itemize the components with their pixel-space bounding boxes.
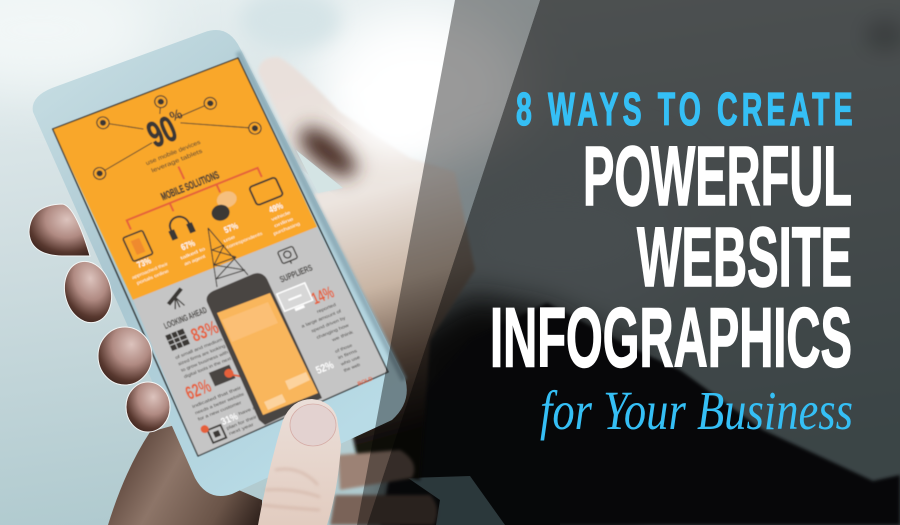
heading: mobile solutions: MOBILE SOLUTIONS (159, 169, 221, 203)
text block: right column two: in firms (337, 348, 359, 360)
icon: headset (165, 213, 195, 239)
stat: 57%: 57% (222, 221, 240, 235)
finger four (126, 382, 170, 432)
text block: left column one (174, 337, 233, 379)
stat: 67% (175, 235, 210, 267)
heading: looking ahead: LOOKING AHEAD (162, 305, 209, 331)
screen grey section (133, 227, 388, 456)
stat: 73% (126, 250, 172, 286)
text block: right column two (334, 341, 365, 373)
headline text (490, 84, 853, 441)
stat: 73%: approached their (131, 261, 169, 280)
icon: telescope (164, 289, 188, 311)
icon: radio tower (208, 228, 248, 287)
text block: left column one: of small and medium (174, 337, 224, 360)
stat: 49%: purchasing (272, 221, 301, 236)
thumb creases (262, 469, 320, 510)
text block: right column two: the web (343, 362, 361, 373)
stat: 57% (218, 213, 264, 250)
screen orange section (53, 58, 317, 300)
dark arm silhouette (380, 295, 900, 525)
hand: four fingers on the left edge (29, 204, 170, 432)
text block: left column one: sized firms are looking (177, 343, 227, 366)
stat: 73%: 73% (135, 256, 153, 270)
stat: 67%: 67% (179, 238, 196, 252)
big stat 90%: 90 (140, 107, 183, 155)
hand: palm and upper finger behind the phone (258, 57, 475, 480)
icon: building (165, 329, 190, 351)
text block: left column two: for a new customer (197, 400, 243, 422)
text block: right column two: who use (340, 354, 361, 367)
stat: 31%: 31% (219, 411, 240, 428)
teal background patch below the fingers (408, 476, 505, 525)
icon: monitor (277, 283, 314, 315)
orange tree connector (114, 140, 262, 229)
dark translucent panel (367, 0, 900, 525)
network of people around 90 percent (72, 64, 263, 196)
icon: camera (277, 246, 299, 267)
stat: 49% (262, 197, 301, 236)
text block: right column one: we think (331, 329, 355, 342)
text block: left column two: indicated that their (191, 385, 243, 409)
stat: 49%: 49% (267, 201, 284, 215)
stat: 49%: online (273, 216, 295, 228)
translucent grey band (357, 0, 540, 525)
finger two (58, 256, 118, 328)
heading line: 8 ways to create: 8 WAYS TO CREATE (516, 84, 853, 136)
icon: magnifier over card (209, 362, 244, 388)
text block: left column three (222, 405, 263, 436)
stat: 57%: correspondents (225, 230, 264, 250)
text block: left column one: to grow business with (180, 349, 230, 373)
screen contents in skewed coordinates (64, 64, 377, 448)
stat: 67%: an agent (183, 253, 207, 266)
phone screen: infographic (53, 58, 388, 456)
text block: left column two (191, 385, 248, 422)
icon: speech bubbles (205, 189, 244, 223)
text block: left column one: digital tools in the next (183, 356, 233, 379)
lower hand cradling the phone (108, 425, 262, 525)
finger one (29, 204, 90, 256)
thumb nail (290, 404, 336, 446)
finger three (98, 327, 152, 385)
stat caption: use mobile devices (145, 140, 202, 167)
text block: right column two: of those (334, 342, 354, 354)
text block: right column one (297, 300, 355, 350)
text block: left column three: have a (238, 405, 257, 416)
phone body (33, 30, 407, 496)
thumb pressing the phone (258, 399, 341, 525)
stat: 14%: 14% (309, 283, 337, 308)
stat: 49%: vehicle (270, 210, 292, 222)
heading: suppliers: SUPPLIERS (278, 263, 314, 284)
text block: left column three: plan for their (225, 414, 258, 431)
lower right fingers under the phone (330, 450, 437, 525)
stat: 83%: 83% (188, 317, 222, 347)
stat: 67%: talked to (180, 246, 207, 261)
text block: right column one: changing how (316, 322, 350, 340)
text block: right column one: reported (316, 302, 337, 314)
big stat 90%: % (167, 105, 185, 124)
stat: 57%: use (223, 234, 237, 243)
text block: left column three: next year (228, 422, 255, 436)
text block: right column one: a large amount of (301, 308, 343, 329)
stat caption (145, 140, 206, 175)
small red tag: BOLD (357, 376, 374, 387)
icon: tablet landscape (249, 177, 283, 206)
stat: 73%: portals online (136, 268, 170, 286)
text block: right column one: spend driven by (310, 315, 347, 333)
stat: 52%: 52% (314, 359, 336, 377)
stat: 62%: 62% (183, 376, 215, 405)
inner phone illustration (207, 273, 322, 425)
text block: left column two: needs a better website (194, 391, 245, 415)
icon: tablet (123, 230, 153, 262)
icon: star and target (199, 419, 226, 445)
stat caption: leverage tablets (151, 149, 204, 174)
